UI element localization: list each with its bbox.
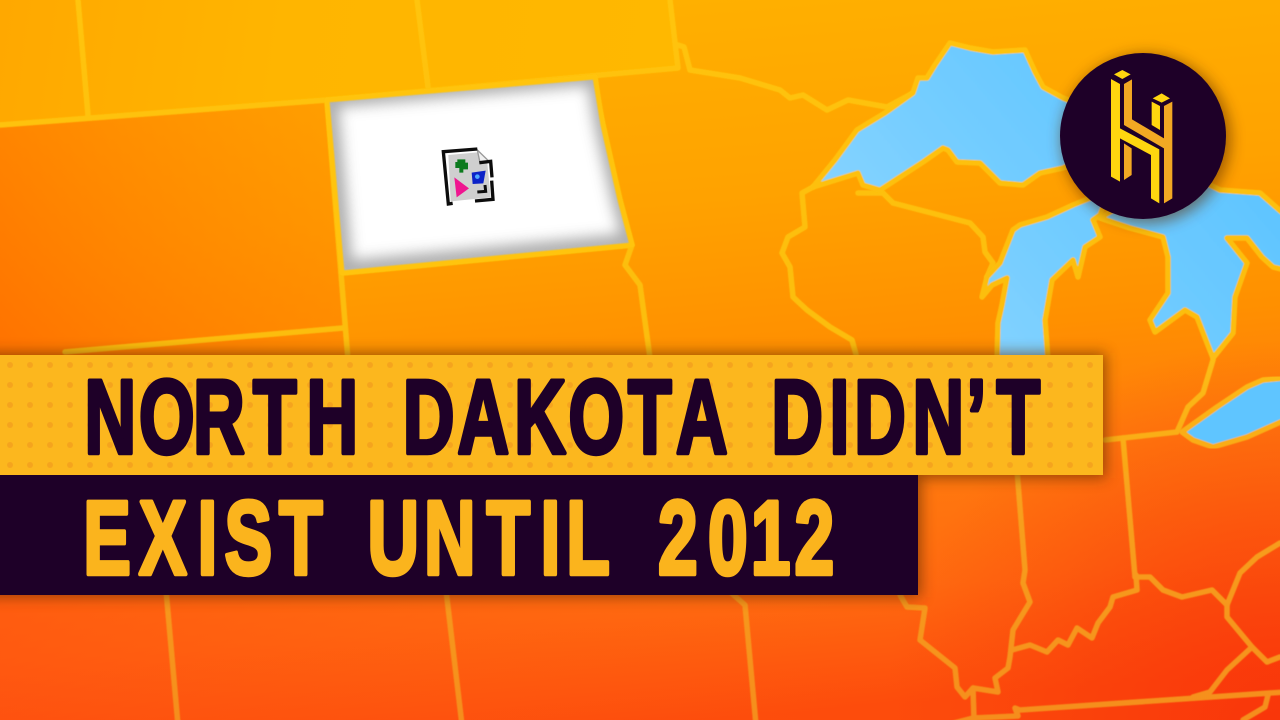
lake huron [1100,170,1280,358]
lake erie [1182,378,1280,447]
headline line two [83,480,834,597]
headline line one: NORTH [85,359,358,476]
north dakota blank state [327,75,633,273]
icon: broken image placeholder [443,149,493,204]
headline line one: DAKOTA [403,359,728,476]
lake superior [813,43,1147,190]
headline line one [85,359,1040,476]
title banner: yellow [0,355,1103,476]
headline line two: EXIST [83,480,323,597]
title banner: dark [0,475,918,597]
headline line two: 2012 [658,480,834,597]
headline line one: DIDN’T [771,359,1040,476]
banner shadows [0,353,1106,597]
lake michigan [982,190,1110,360]
headline line two: UNTIL [367,480,610,597]
logo: H badge [1060,53,1226,219]
logo shadow [1061,54,1231,224]
